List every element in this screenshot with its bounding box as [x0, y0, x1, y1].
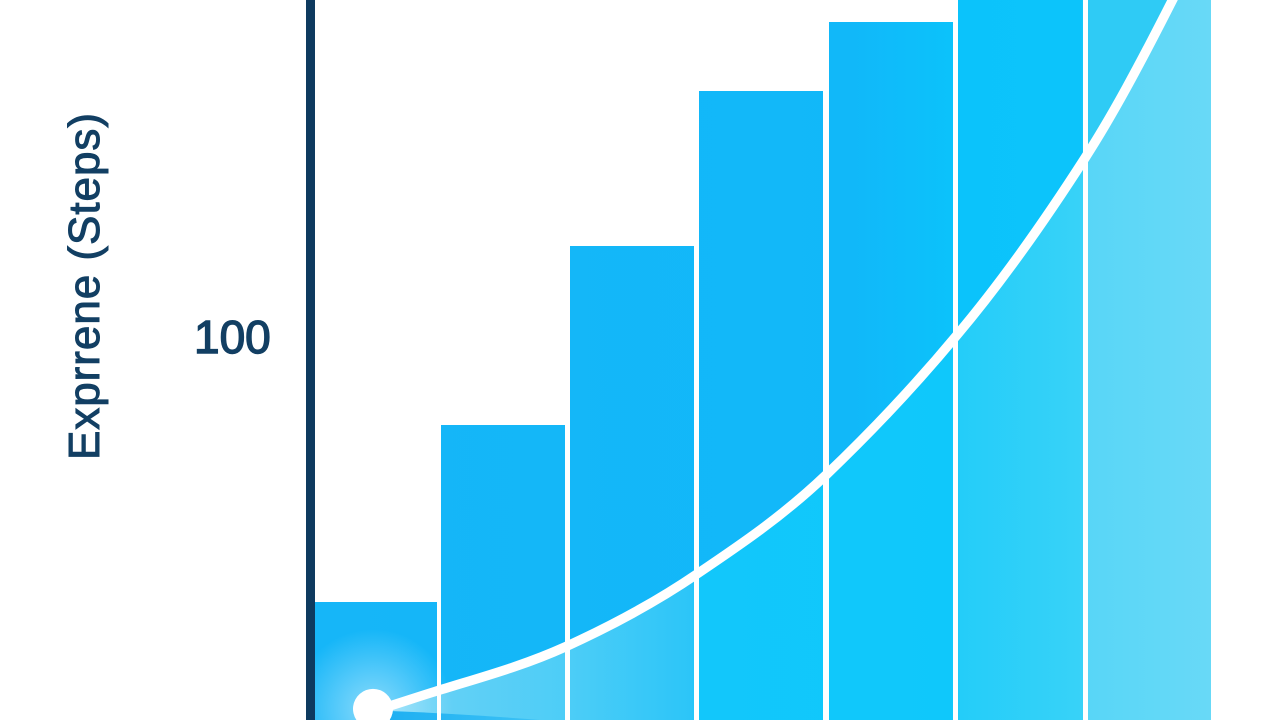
growth curve [380, 0, 1174, 709]
glow at curve start [315, 635, 444, 720]
y-axis title: Exprrene (Steps) [60, 113, 109, 460]
y-axis tick label: 100 [194, 311, 271, 363]
bars [315, 0, 1211, 720]
curve start marker [353, 689, 393, 720]
darker wedge below curve start [390, 711, 540, 720]
y-axis line [306, 0, 315, 720]
area under the curve [373, 0, 1211, 720]
